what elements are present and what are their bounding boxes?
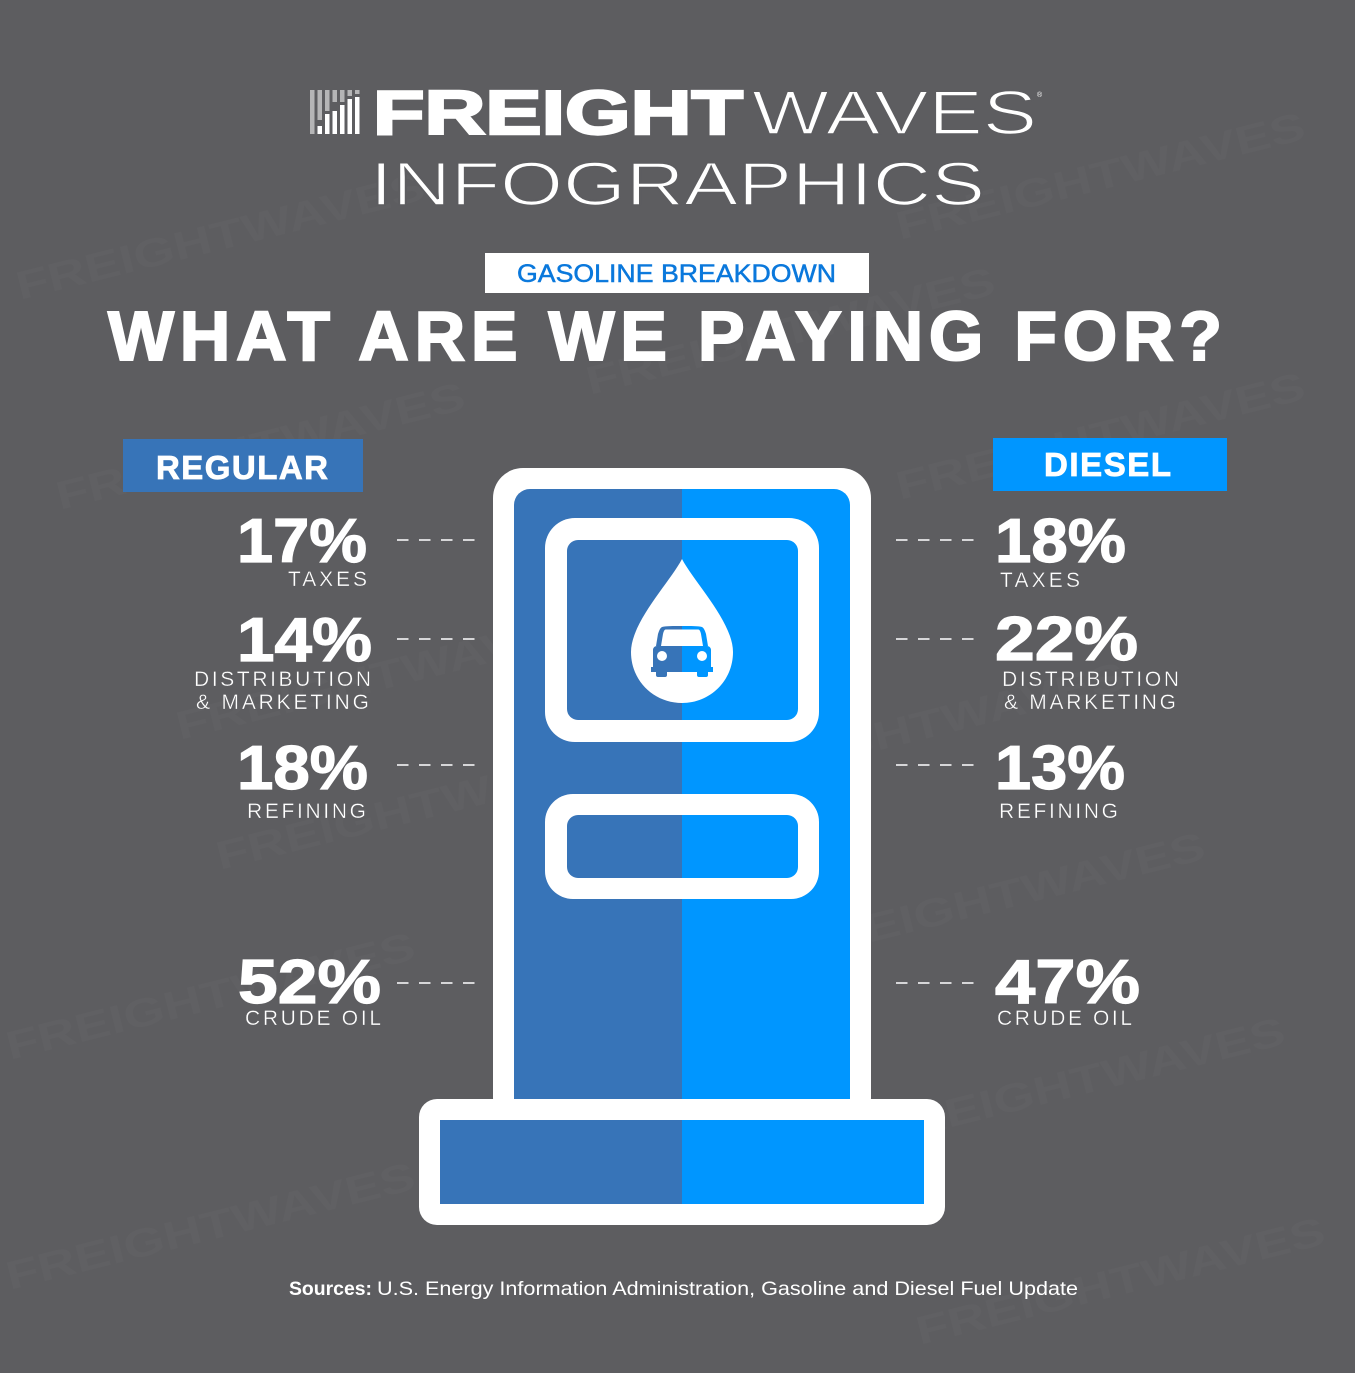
regular refining 18%: 18% bbox=[237, 734, 368, 803]
regular distribution and marketing 14%: & MARKETING bbox=[196, 691, 369, 714]
diesel distribution and marketing 22%: 22% bbox=[995, 605, 1138, 674]
heading: WHAT ARE WE PAYING FOR? bbox=[108, 297, 1222, 375]
diesel distribution and marketing 22%: DISTRIBUTION bbox=[1002, 668, 1179, 691]
text: FREIGHTWAVES bbox=[52, 374, 470, 519]
diesel refining 13%: 13% bbox=[995, 734, 1125, 803]
sources: U.S. Energy Information Administration, Gasoline and Diesel Fuel Update bbox=[377, 1278, 1078, 1300]
text: FREIGHTWAVES bbox=[792, 824, 1210, 969]
panel: diesel bbox=[896, 438, 1227, 1030]
diesel crude oil 47%: CRUDE OIL bbox=[997, 1007, 1132, 1030]
text: FREIGHTWAVES bbox=[872, 1009, 1290, 1154]
diesel taxes 18%: 18% bbox=[995, 507, 1126, 576]
logo: FreightWaves bars icon bbox=[310, 90, 360, 134]
pump screen bbox=[545, 518, 819, 742]
text: FREIGHTWAVES bbox=[892, 104, 1310, 249]
logo wordmark: FREIGHTWAVES: WAVES bbox=[752, 79, 1037, 148]
text: FREIGHTWAVES bbox=[712, 654, 1130, 799]
regular taxes 17%: TAXES bbox=[288, 568, 367, 591]
pump body bbox=[493, 468, 871, 1128]
text: FREIGHTWAVES bbox=[2, 1154, 420, 1299]
regular header: REGULAR bbox=[156, 449, 328, 486]
gas pump illustration bbox=[419, 468, 945, 1225]
text: FREIGHTWAVES bbox=[892, 364, 1310, 509]
logo wordmark: FREIGHTWAVES bbox=[373, 79, 1043, 148]
pump base bbox=[419, 1099, 945, 1225]
regular refining 18%: REFINING bbox=[247, 800, 366, 823]
text: FREIGHTWAVES bbox=[12, 164, 430, 309]
text: FREIGHTWAVES bbox=[172, 604, 590, 749]
diesel header bbox=[993, 438, 1227, 491]
text: FREIGHTWAVES bbox=[212, 734, 630, 879]
badge: gasoline breakdown bbox=[485, 253, 869, 293]
regular header bbox=[123, 439, 363, 492]
panel: regular bbox=[123, 439, 477, 1030]
sources: Sources: bbox=[289, 1279, 372, 1300]
text: FREIGHTWAVES bbox=[2, 924, 420, 1069]
logo wordmark: FREIGHTWAVES: FREIGHT bbox=[373, 79, 743, 148]
regular taxes 17%: 17% bbox=[237, 507, 367, 576]
icon: fuel drop with car bbox=[631, 559, 733, 703]
text: FREIGHTWAVES bbox=[912, 1209, 1330, 1354]
logo wordmark: FREIGHTWAVES: ® bbox=[1037, 91, 1043, 99]
diesel distribution and marketing 22% bbox=[995, 605, 1179, 714]
diesel distribution and marketing 22%: & MARKETING bbox=[1004, 691, 1176, 714]
diesel taxes 18%: TAXES bbox=[1000, 569, 1080, 592]
regular distribution and marketing 14%: DISTRIBUTION bbox=[194, 668, 371, 691]
diesel crude oil 47%: 47% bbox=[995, 948, 1140, 1017]
regular crude oil 52%: 52% bbox=[238, 948, 381, 1017]
diesel header: DIESEL bbox=[1044, 446, 1171, 483]
icon: car bbox=[651, 626, 713, 677]
badge: gasoline breakdown: GASOLINE BREAKDOWN bbox=[517, 260, 836, 288]
regular distribution and marketing 14%: 14% bbox=[237, 606, 372, 675]
pump display slot bbox=[545, 794, 819, 899]
subtitle: INFOGRAPHICS: INFOGRAPHICS bbox=[370, 150, 985, 218]
diesel refining 13%: REFINING bbox=[999, 800, 1118, 823]
regular crude oil 52%: CRUDE OIL bbox=[245, 1007, 381, 1030]
text: FREIGHTWAVES bbox=[582, 259, 1000, 404]
regular distribution and marketing 14% bbox=[194, 606, 372, 714]
